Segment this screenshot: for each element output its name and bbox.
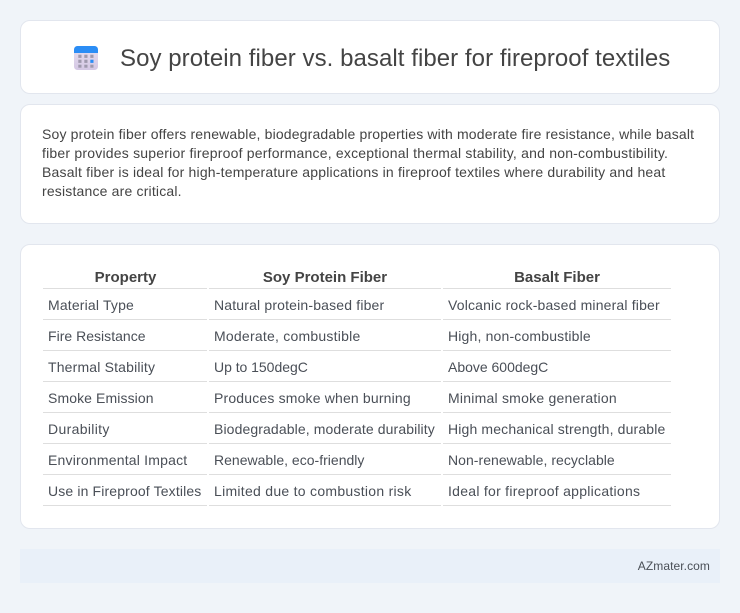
row: Material Type bbox=[48, 297, 660, 313]
row: Environmental Impact bbox=[48, 452, 615, 468]
row: Smoke Emission: Produces smoke when burning bbox=[214, 390, 411, 406]
row: Environmental Impact: Environmental Impact bbox=[48, 452, 187, 468]
footer bar bbox=[20, 549, 720, 583]
panel: comparison table card bbox=[20, 244, 720, 529]
summary text: resistance are critical. bbox=[42, 183, 182, 199]
row: Thermal Stability: Thermal Stability bbox=[48, 359, 155, 375]
row: Environmental Impact: Renewable, eco-friendly bbox=[214, 452, 364, 468]
summary text bbox=[42, 126, 694, 199]
title: Soy protein fiber vs. basalt fiber for fireproof textiles bbox=[120, 45, 670, 72]
table header: Property: Property bbox=[95, 269, 156, 286]
row: Fire Resistance: Moderate, combustible bbox=[214, 328, 360, 344]
row: Fire Resistance bbox=[48, 328, 591, 344]
row: Fire Resistance: Fire Resistance bbox=[48, 328, 146, 344]
row: Smoke Emission: Minimal smoke generation bbox=[448, 390, 617, 406]
panel: title card bbox=[20, 20, 720, 94]
summary text: Basalt fiber is ideal for high-temperature applications in fireproof textiles where durability and heat bbox=[42, 164, 665, 180]
row: Durability: Biodegradable, moderate durability bbox=[214, 421, 435, 437]
row: Durability: Durability bbox=[48, 421, 110, 437]
summary text: fiber provides superior fireproof performance, exceptional thermal stability, and non-combustibility. bbox=[42, 145, 668, 161]
row: Durability bbox=[48, 421, 665, 437]
row: Smoke Emission: Smoke Emission bbox=[48, 390, 154, 406]
row: Material Type: Material Type bbox=[48, 297, 134, 313]
footer source: AZmater.com bbox=[638, 559, 710, 573]
row: Use in Fireproof Textiles bbox=[48, 483, 640, 499]
row: Use in Fireproof Textiles: Limited due to combustion risk bbox=[214, 483, 412, 499]
row: Fire Resistance: High, non-combustible bbox=[448, 328, 591, 344]
row: Environmental Impact: Non-renewable, recyclable bbox=[448, 452, 615, 468]
row: Durability: High mechanical strength, durable bbox=[448, 421, 665, 437]
row: Use in Fireproof Textiles: Ideal for fireproof applications bbox=[448, 483, 640, 499]
row: Use in Fireproof Textiles: Use in Fireproof Textiles bbox=[48, 483, 201, 499]
row: Smoke Emission bbox=[48, 390, 617, 406]
row: Thermal Stability: Above 600degC bbox=[448, 359, 548, 375]
panel: summary card bbox=[20, 104, 720, 224]
icon: calendar bbox=[74, 46, 98, 70]
row: Material Type: Natural protein-based fiber bbox=[214, 297, 384, 313]
row: Thermal Stability bbox=[48, 359, 548, 375]
row: Material Type: Volcanic rock-based mineral fiber bbox=[448, 297, 660, 313]
summary text: Soy protein fiber offers renewable, biodegradable properties with moderate fire resistance, while basalt bbox=[42, 126, 694, 142]
table header: Soy Protein Fiber: Soy Protein Fiber bbox=[263, 269, 387, 286]
table header: Basalt Fiber: Basalt Fiber bbox=[514, 269, 600, 286]
row: Thermal Stability: Up to 150degC bbox=[214, 359, 308, 375]
